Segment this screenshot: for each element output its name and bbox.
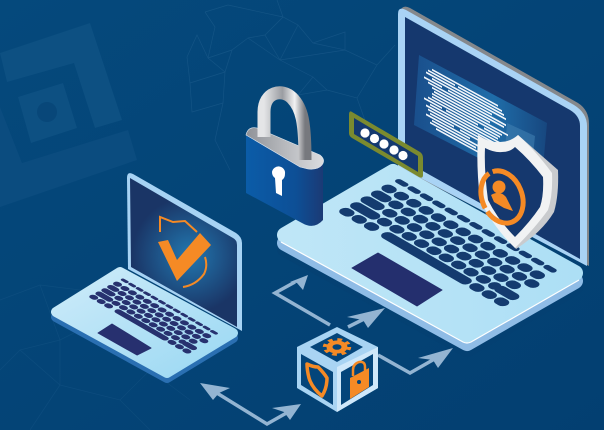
- cube top panel: [310, 333, 363, 362]
- padlock shackle: [264, 93, 305, 160]
- small laptop: [56, 173, 242, 378]
- background logo mark: [0, 23, 137, 207]
- big laptop screen: [398, 7, 589, 266]
- security cube: [297, 327, 378, 412]
- background network pattern: [0, 0, 395, 430]
- small screen logo: [158, 217, 211, 287]
- padlock cap: [246, 128, 324, 169]
- small laptop keyboard: [93, 280, 219, 352]
- shield face: [477, 135, 552, 248]
- cube right panel: [341, 354, 373, 405]
- icon: gear: [325, 340, 349, 354]
- big laptop keyboard: [345, 181, 558, 303]
- password box: [349, 111, 423, 178]
- arrow: cube to big laptop right: [378, 348, 453, 373]
- arrow: cube to big laptop left: [275, 275, 330, 325]
- padlock body: [246, 135, 323, 226]
- arrow: cube to big laptop centre: [347, 308, 385, 328]
- shield side: [510, 135, 558, 249]
- security shield: [473, 135, 558, 249]
- small laptop trackpad: [98, 324, 151, 355]
- big laptop base: [281, 172, 579, 349]
- small laptop base: [56, 272, 233, 378]
- password dots: [360, 128, 408, 160]
- icon: small lock: [350, 362, 369, 399]
- big laptop: [281, 7, 589, 349]
- arrow: small laptop to cube: [200, 383, 301, 424]
- big laptop trackpad: [352, 253, 442, 306]
- cube frame: [297, 327, 378, 412]
- code window: [414, 55, 547, 190]
- icon: small shield: [307, 364, 327, 396]
- user icon: [491, 180, 513, 211]
- padlock: [246, 93, 324, 226]
- cube left panel: [301, 354, 333, 405]
- small laptop screen: [127, 173, 242, 331]
- orange user ring: [473, 164, 531, 230]
- keyhole: [272, 166, 285, 196]
